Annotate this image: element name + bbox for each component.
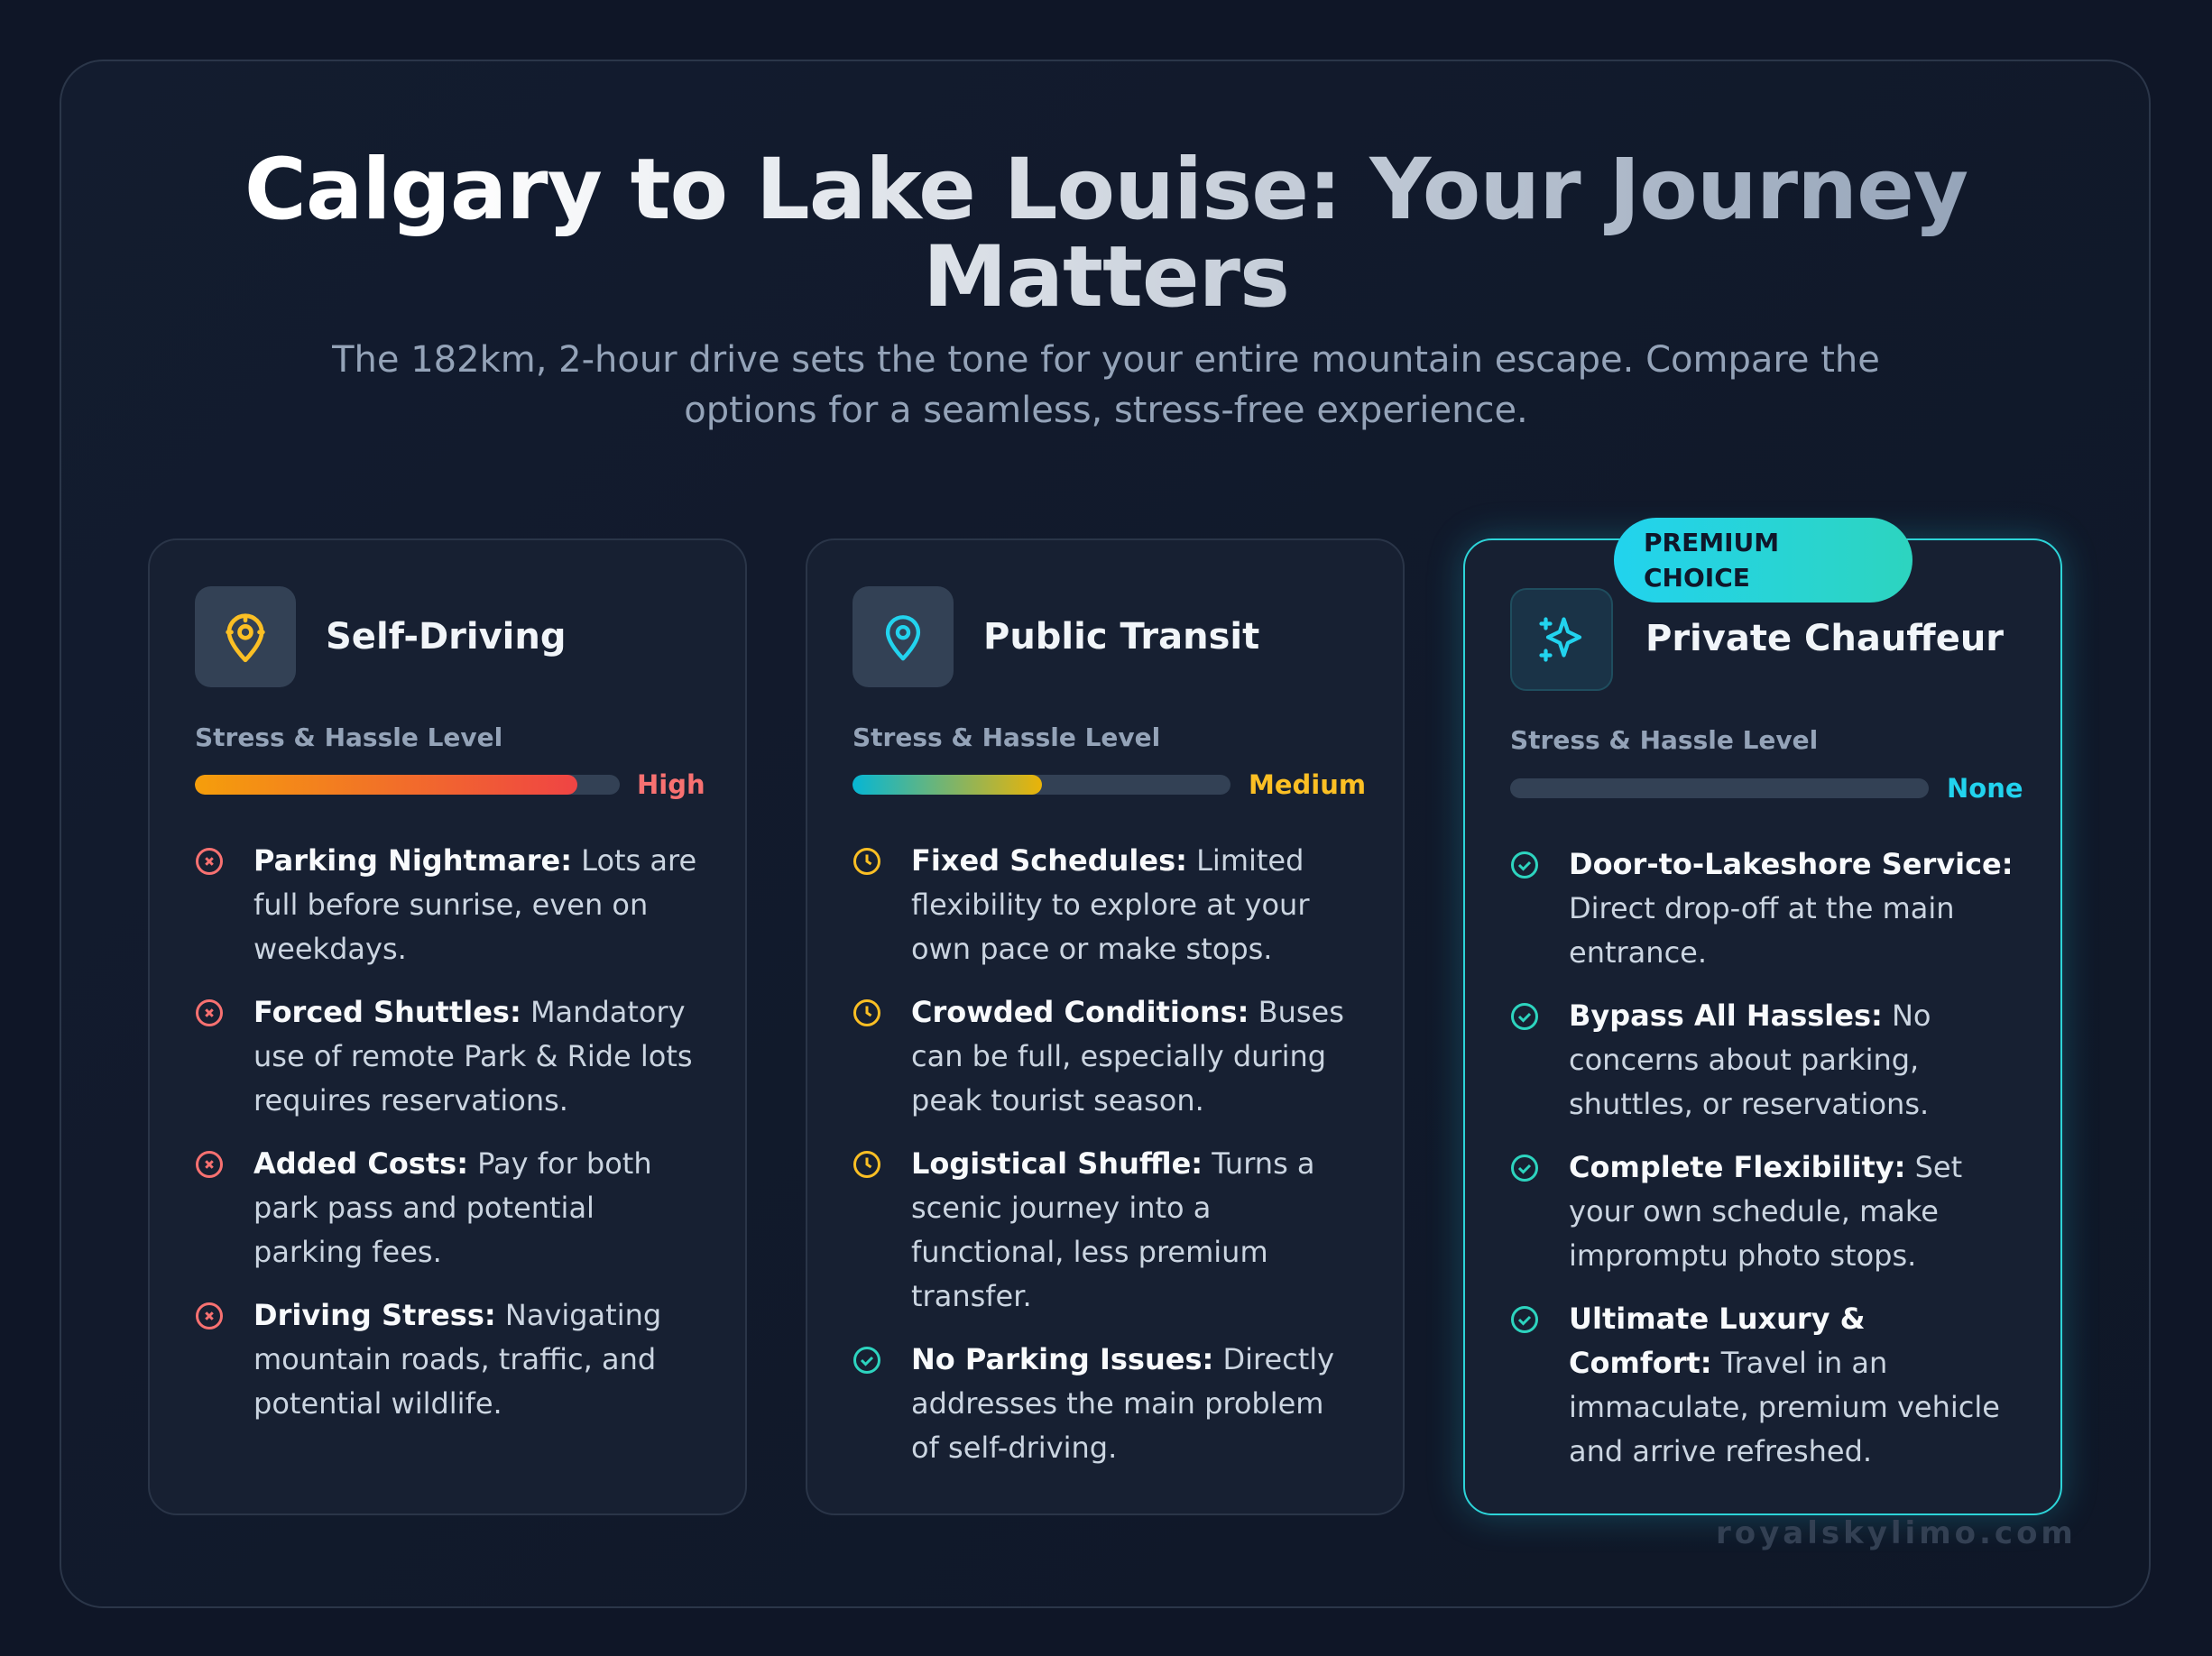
list: cons: Added Costs: Pay for both	[253, 1146, 652, 1181]
list: tradeoffs: of self-driving.	[911, 1431, 1117, 1465]
subtitle: options for a seamless, stress-free experience.	[684, 390, 1528, 431]
list: tradeoffs: flexibility to explore at your	[911, 888, 1309, 922]
watermark: royalskylimo.com	[1716, 1515, 2077, 1551]
list: benefits: impromptu photo stops.	[1569, 1238, 1916, 1273]
list: benefits: your own schedule, make	[1569, 1194, 1939, 1228]
badge: premium choice: PREMIUM	[1644, 528, 1779, 557]
heading: Private Chauffeur	[1645, 618, 2004, 659]
title: Calgary to Lake Louise: Your Journey	[244, 141, 1968, 239]
list: tradeoffs: functional, less premium	[911, 1235, 1268, 1269]
list: benefits: entrance.	[1569, 935, 1707, 970]
list: tradeoffs: No Parking Issues: Directly	[911, 1342, 1334, 1376]
list: benefits: shuttles, or reservations.	[1569, 1087, 1929, 1121]
list: tradeoffs	[853, 843, 1344, 1465]
badge: premium choice: CHOICE	[1644, 563, 1750, 593]
icon: location target	[195, 586, 296, 687]
panel: public transit	[806, 538, 1405, 1515]
level label: None	[1947, 773, 2023, 804]
list: benefits	[1511, 847, 2014, 1468]
stress label: Stress & Hassle Level	[853, 722, 1160, 752]
list: cons: park pass and potential	[253, 1191, 594, 1225]
subtitle: The 182km, 2-hour drive sets the tone for your entire mountain escape. Compare the	[332, 339, 1880, 381]
list: benefits: and arrive refreshed.	[1569, 1434, 1872, 1468]
list: cons: parking fees.	[253, 1235, 442, 1269]
badge: premium choice	[1614, 518, 1912, 603]
list: tradeoffs: transfer.	[911, 1279, 1032, 1313]
bar: high	[195, 775, 620, 795]
heading: Self-Driving	[326, 616, 566, 658]
list: benefits: Bypass All Hassles: No	[1569, 998, 1931, 1033]
list: benefits: Ultimate Luxury &	[1569, 1302, 1866, 1336]
list: tradeoffs: Fixed Schedules: Limited	[911, 843, 1304, 878]
heading: Public Transit	[983, 616, 1259, 658]
list: benefits: concerns about parking,	[1569, 1043, 1919, 1077]
list: benefits: Door-to-Lakeshore Service:	[1569, 847, 2014, 881]
list: cons: Driving Stress: Navigating	[253, 1298, 661, 1332]
list: tradeoffs: peak tourist season.	[911, 1083, 1204, 1118]
list: tradeoffs: own pace or make stops.	[911, 932, 1272, 966]
stress label: Stress & Hassle Level	[1510, 725, 1818, 755]
level label: High	[637, 769, 705, 800]
list: cons: full before sunrise, even on	[253, 888, 648, 922]
list: tradeoffs: addresses the main problem	[911, 1386, 1323, 1421]
list: tradeoffs: scenic journey into a	[911, 1191, 1211, 1225]
list: cons: potential wildlife.	[253, 1386, 502, 1421]
list: cons: requires reservations.	[253, 1083, 568, 1118]
subtitle	[332, 339, 1880, 431]
title	[0, 146, 2212, 321]
list: tradeoffs: can be full, especially during	[911, 1039, 1326, 1073]
list: benefits: Direct drop-off at the main	[1569, 891, 1955, 925]
level label: Medium	[1249, 769, 1366, 800]
list: cons	[196, 843, 696, 1421]
list: benefits: Comfort: Travel in an	[1569, 1346, 1887, 1380]
list: cons: weekdays.	[253, 932, 407, 966]
title: Matters	[923, 228, 1289, 327]
list: benefits: immaculate, premium vehicle	[1569, 1390, 2000, 1424]
bar: medium	[853, 775, 1230, 795]
stress label: Stress & Hassle Level	[195, 722, 502, 752]
list: tradeoffs: Crowded Conditions: Buses	[911, 995, 1344, 1029]
list: tradeoffs: Logistical Shuffle: Turns a	[911, 1146, 1315, 1181]
icon: sparkle	[1510, 588, 1613, 691]
icon: map pin	[853, 586, 954, 687]
panel: self-driving	[148, 538, 747, 1515]
list: cons: use of remote Park & Ride lots	[253, 1039, 693, 1073]
list: benefits: Complete Flexibility: Set	[1569, 1150, 1962, 1184]
list: cons: mountain roads, traffic, and	[253, 1342, 656, 1376]
list: cons: Forced Shuttles: Mandatory	[253, 995, 686, 1029]
bar: none	[1510, 778, 1929, 798]
list: cons: Parking Nightmare: Lots are	[253, 843, 696, 878]
panel: private chauffeur	[1463, 538, 2062, 1515]
